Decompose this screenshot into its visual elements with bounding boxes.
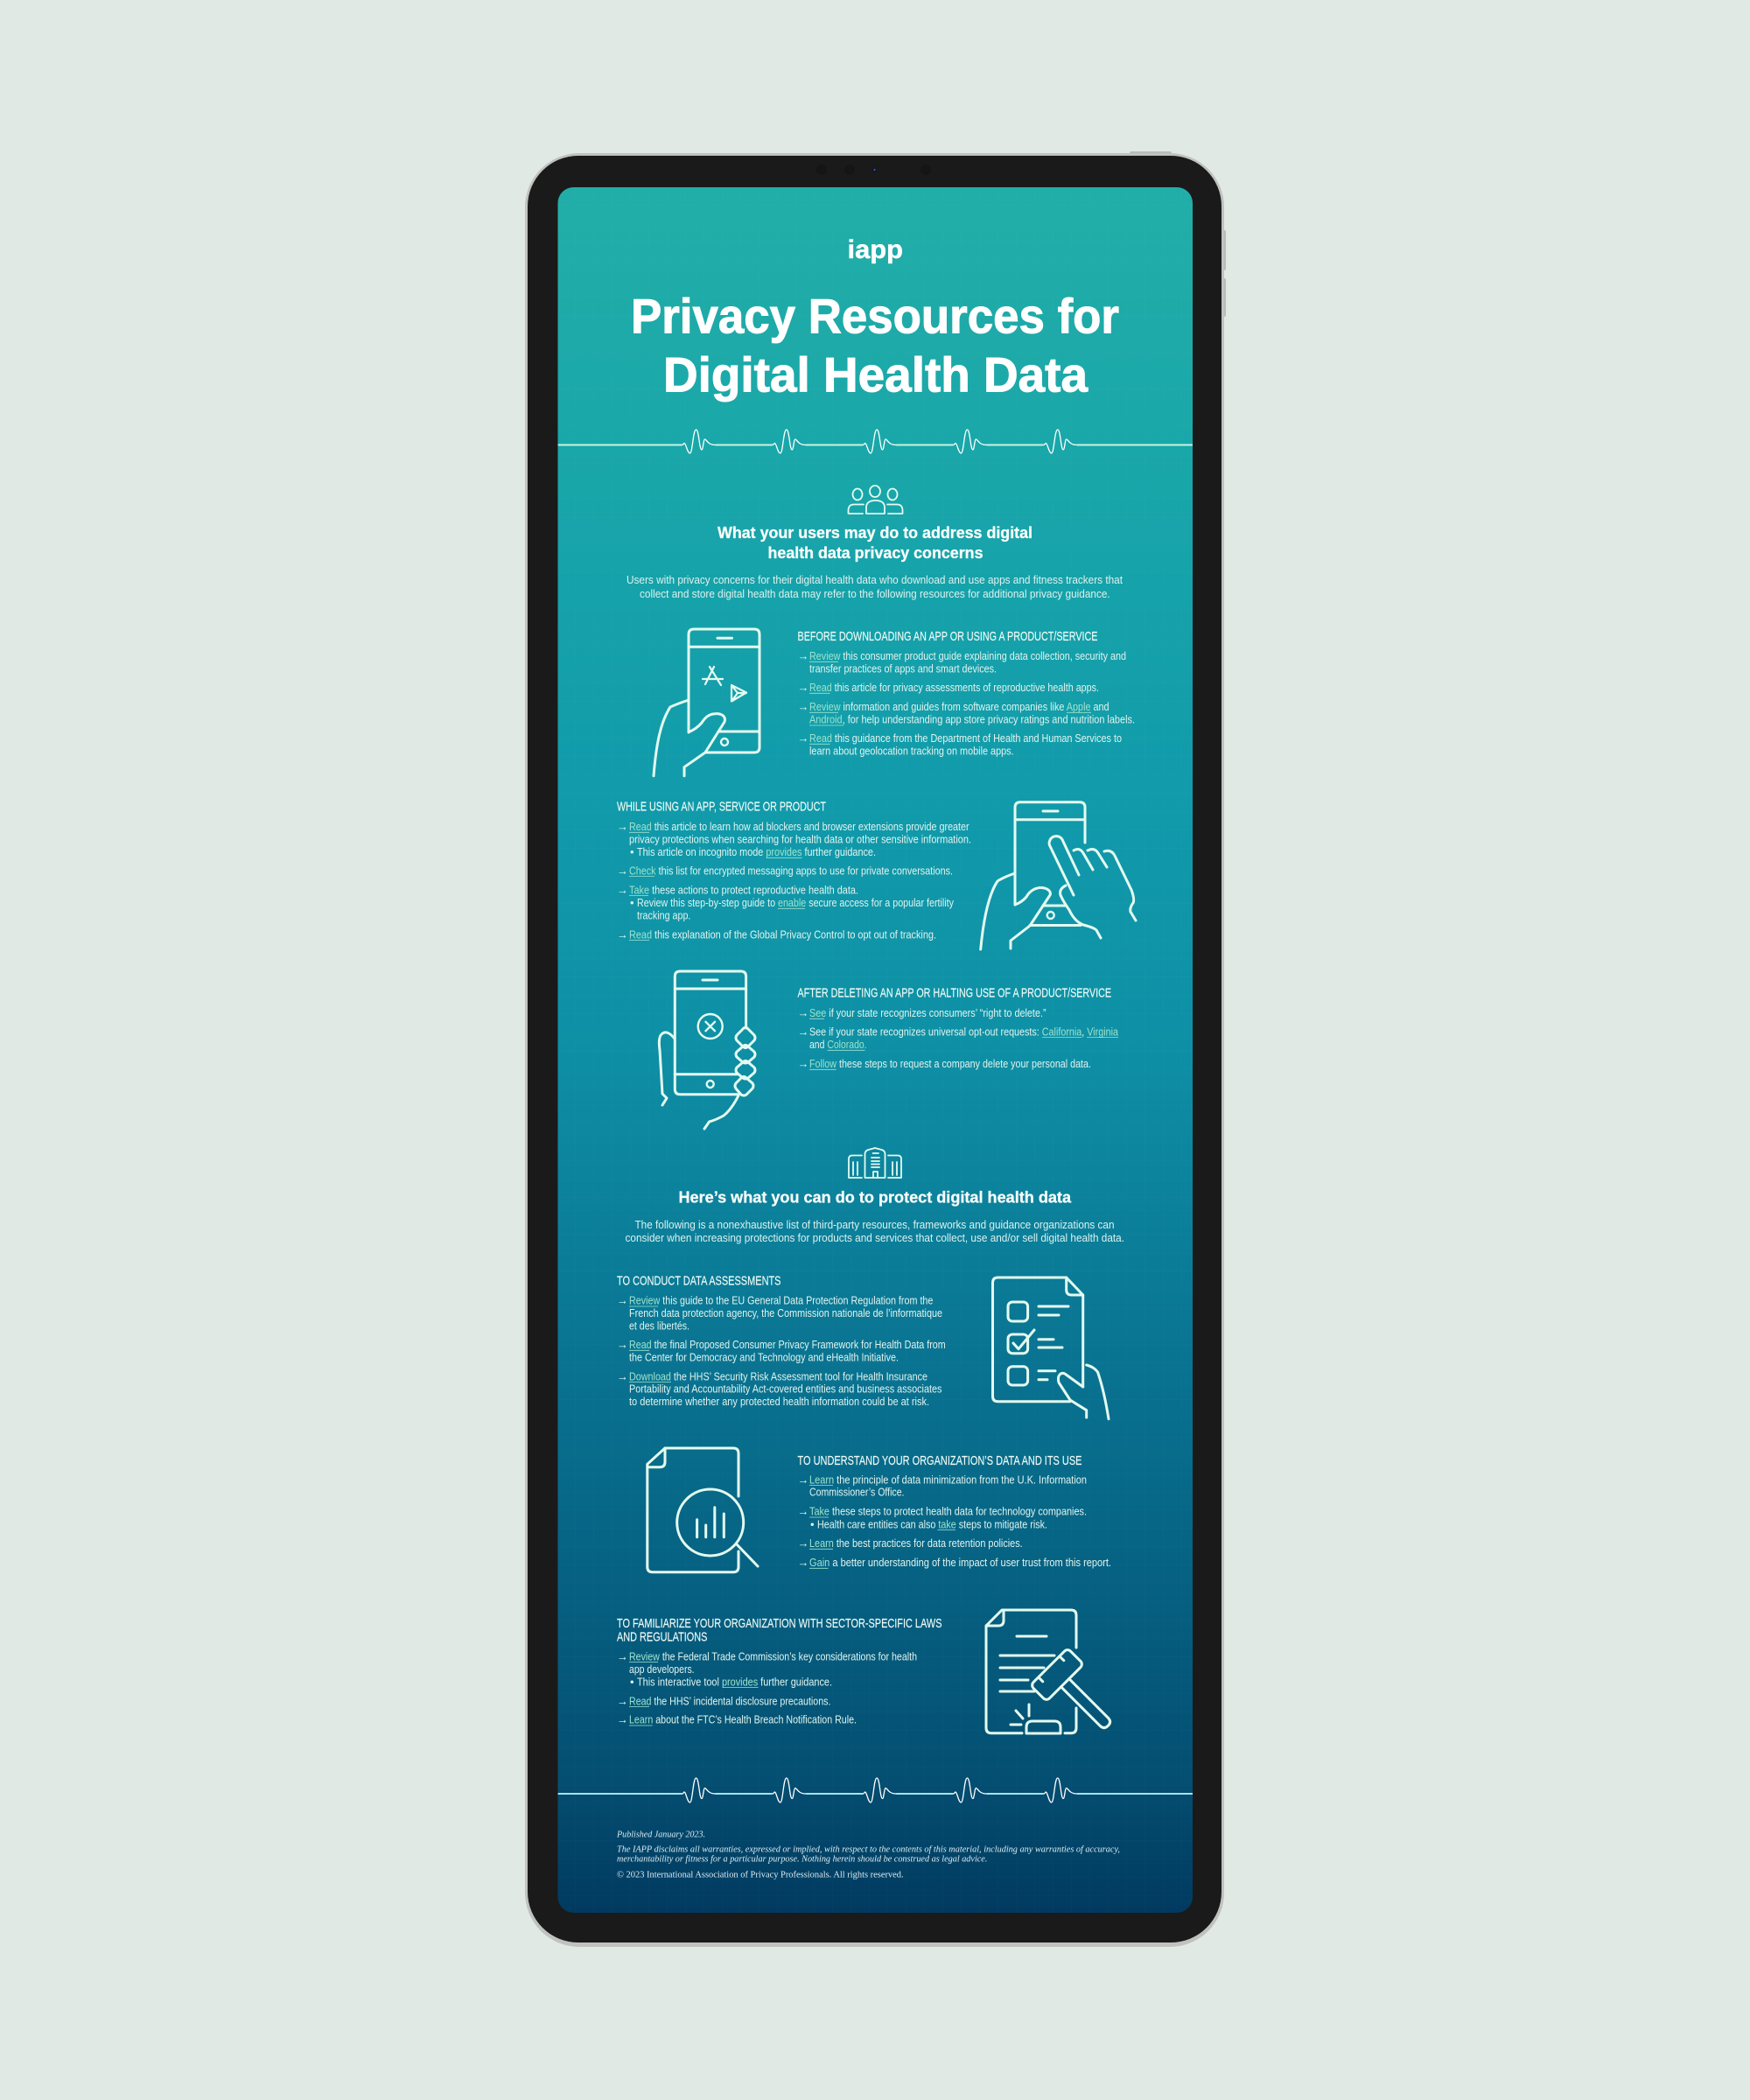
block: understand your data: Health care entities can also take steps to mitigate risk. bbox=[817, 1518, 1047, 1530]
block: sector laws: → bbox=[617, 1649, 628, 1662]
block: data assessments bbox=[617, 1274, 946, 1408]
heartbeat line top bbox=[558, 430, 1193, 453]
device black bezel bbox=[528, 156, 1222, 1942]
icon: document with gavel bbox=[986, 1610, 1127, 1745]
intro paragraph: users: Users with privacy concerns for their digital health data who download and use apps and fitness trackers that bbox=[626, 573, 1123, 586]
block: while using: → bbox=[617, 883, 628, 896]
icon: buildings bbox=[849, 1148, 901, 1178]
block: while using: WHILE USING AN APP, SERVICE OR PRODUCT bbox=[617, 801, 826, 815]
intro paragraph: users bbox=[626, 573, 1123, 600]
block: before downloading bbox=[798, 630, 1135, 757]
block: understand your data: Gain a better understanding of the impact of user trust from this report. bbox=[809, 1557, 1111, 1569]
block: before downloading: BEFORE DOWNLOADING AN APP OR USING A PRODUCT/SERVICE bbox=[798, 630, 1098, 644]
block: data assessments: et des libertés. bbox=[629, 1320, 690, 1332]
block: while using: Take these actions to protect reproductive health data. bbox=[629, 884, 858, 896]
block: while using: Review this step-by-step guide to enable secure access for a popular fertility bbox=[637, 897, 955, 909]
title: Privacy Resources for bbox=[631, 288, 1119, 343]
icon: two hands tapping phone bbox=[981, 802, 1136, 949]
footer notes: merchantability or fitness for a particular purpose. Nothing herein should be construed as legal advice. bbox=[617, 1854, 987, 1865]
block: sector laws: Review the Federal Trade Commission’s key considerations for health bbox=[629, 1650, 917, 1662]
block: before downloading: → bbox=[798, 700, 808, 713]
block: while using: → bbox=[617, 928, 628, 941]
section heading: organizations: Here’s what you can do to protect digital health data bbox=[679, 1187, 1072, 1206]
device silver frame bbox=[525, 153, 1224, 1947]
block: data assessments: TO CONDUCT DATA ASSESSMENTS bbox=[617, 1274, 780, 1288]
block: before downloading: Android, for help understanding app store privacy ratings and nutrition labels. bbox=[809, 714, 1135, 726]
section heading: users: health data privacy concerns bbox=[768, 543, 984, 562]
block: sector laws: TO FAMILIARIZE YOUR ORGANIZATION WITH SECTOR-SPECIFIC LAWS bbox=[617, 1617, 942, 1631]
block: data assessments: → bbox=[617, 1369, 628, 1382]
block: after deleting: See if your state recognizes consumers’ “right to delete.” bbox=[809, 1007, 1046, 1019]
intro paragraph: organizations bbox=[625, 1218, 1124, 1244]
block: before downloading: Read this guidance from the Department of Health and Human Services to bbox=[809, 732, 1122, 745]
footer notes bbox=[616, 1829, 1120, 1880]
block: while using: • bbox=[630, 845, 634, 858]
block: before downloading: → bbox=[798, 649, 808, 662]
block: understand your data: Learn the best practices for data retention policies. bbox=[809, 1537, 1023, 1550]
block: sector laws: Read the HHS’ incidental disclosure precautions. bbox=[629, 1695, 830, 1707]
block: while using: → bbox=[617, 820, 628, 833]
section heading: users bbox=[718, 523, 1032, 562]
block: understand your data: • bbox=[810, 1517, 815, 1530]
iapp logo: iapp bbox=[847, 235, 903, 264]
block: understand your data: → bbox=[798, 1473, 808, 1486]
block: understand your data: → bbox=[798, 1505, 808, 1518]
block: data assessments: French data protection agency, the Commission nationale de l’informatique bbox=[629, 1307, 942, 1320]
block: data assessments: Portability and Accountability Act-covered entities and business associates bbox=[629, 1383, 942, 1396]
icon: people bbox=[849, 486, 903, 514]
block: before downloading: Review this consumer product guide explaining data collection, security and bbox=[809, 650, 1126, 662]
icon: hand gripping phone with X bbox=[659, 971, 755, 1129]
block: before downloading: → bbox=[798, 732, 808, 745]
block: data assessments: → bbox=[617, 1294, 628, 1307]
footer notes: Published January 2023. bbox=[616, 1829, 705, 1839]
block: before downloading: learn about geolocation tracking on mobile apps. bbox=[809, 745, 1014, 757]
intro paragraph: organizations: consider when increasing protections for products and services that collect, use and/or sell digital health data. bbox=[625, 1231, 1124, 1244]
block: data assessments: the Center for Democracy and Technology and eHealth Initiative. bbox=[629, 1351, 899, 1363]
block: while using: Check this list for encrypted messaging apps to use for private conversations. bbox=[629, 864, 953, 877]
block: while using: Read this explanation of the Global Privacy Control to opt out of tracking. bbox=[629, 928, 936, 941]
footer notes: The IAPP disclaims all warranties, expressed or implied, with respect to the contents of this material, including any warranties of accuracy, bbox=[617, 1844, 1120, 1855]
block: after deleting: → bbox=[798, 1057, 808, 1070]
block: before downloading: Read this article for privacy assessments of reproductive health apps. bbox=[809, 682, 1099, 694]
block: data assessments: Download the HHS’ Security Risk Assessment tool for Health Insurance bbox=[629, 1370, 928, 1382]
block: data assessments: Review this guide to the EU General Data Protection Regulation from the bbox=[629, 1295, 933, 1307]
title bbox=[631, 288, 1119, 402]
block: understand your data: → bbox=[798, 1536, 808, 1550]
block: sector laws: This interactive tool provides further guidance. bbox=[637, 1676, 832, 1688]
block: after deleting: Follow these steps to request a company delete your personal data. bbox=[809, 1058, 1091, 1070]
block: after deleting: See if your state recognizes universal opt-out requests: California, Virginia bbox=[809, 1026, 1118, 1038]
block: understand your data bbox=[798, 1454, 1111, 1569]
title: Digital Health Data bbox=[663, 347, 1088, 402]
tablet device bbox=[525, 151, 1226, 1947]
block: after deleting: → bbox=[798, 1025, 808, 1038]
device side buttons bbox=[1130, 151, 1226, 317]
intro paragraph: organizations: The following is a nonexhaustive list of third-party resources, frameworks and guidance organizations can bbox=[635, 1218, 1115, 1231]
block: sector laws: AND REGULATIONS bbox=[617, 1630, 707, 1644]
block: while using: tracking app. bbox=[637, 910, 690, 922]
block: sector laws: Learn about the FTC’s Health Breach Notification Rule. bbox=[629, 1714, 857, 1726]
icon: document with magnifier and bars bbox=[648, 1448, 758, 1572]
block: while using: This article on incognito mode provides further guidance. bbox=[637, 846, 876, 858]
block: sector laws: app developers. bbox=[629, 1663, 695, 1676]
block: understand your data: Take these steps to protect health data for technology companies. bbox=[809, 1506, 1087, 1518]
block: data assessments: Read the final Proposed Consumer Privacy Framework for Health Data from bbox=[629, 1339, 946, 1351]
heartbeat line bottom bbox=[558, 1778, 1193, 1802]
block: data assessments: to determine whether any protected health information could be at risk. bbox=[629, 1396, 929, 1408]
front camera bbox=[816, 164, 931, 175]
block: after deleting: → bbox=[798, 1006, 808, 1019]
block: sector laws: → bbox=[617, 1713, 628, 1726]
icon: hand holding phone with app stores bbox=[654, 629, 760, 776]
block: while using bbox=[617, 801, 971, 941]
block: before downloading: Review information and guides from software companies like Apple and bbox=[809, 701, 1110, 713]
block: sector laws: → bbox=[617, 1694, 628, 1707]
footer notes: © 2023 International Association of Privacy Professionals. All rights reserved. bbox=[617, 1869, 904, 1880]
block: sector laws: • bbox=[630, 1675, 634, 1688]
section heading: users: What your users may do to address digital bbox=[718, 523, 1032, 542]
block: understand your data: TO UNDERSTAND YOUR ORGANIZATION’S DATA AND ITS USE bbox=[798, 1454, 1082, 1468]
block: understand your data: Commissioner’s Office. bbox=[809, 1487, 905, 1499]
block: while using: Read this article to learn how ad blockers and browser extensions provide greater bbox=[629, 821, 970, 833]
block: while using: → bbox=[617, 864, 628, 877]
block: after deleting bbox=[798, 987, 1118, 1070]
intro paragraph: users: collect and store digital health data may refer to the following resources for additional privacy guidance. bbox=[640, 587, 1110, 600]
block: sector laws bbox=[617, 1617, 942, 1726]
block: understand your data: → bbox=[798, 1556, 808, 1569]
block: after deleting: and Colorado. bbox=[809, 1039, 867, 1051]
block: before downloading: → bbox=[798, 681, 808, 694]
block: while using: privacy protections when searching for health data or other sensitive information. bbox=[629, 833, 971, 845]
block: after deleting: AFTER DELETING AN APP OR HALTING USE OF A PRODUCT/SERVICE bbox=[798, 987, 1111, 1001]
icon: checklist with hand bbox=[992, 1278, 1109, 1419]
screen bbox=[558, 187, 1193, 1913]
block: while using: • bbox=[630, 896, 634, 909]
block: understand your data: Learn the principle of data minimization from the U.K. Information bbox=[809, 1474, 1087, 1486]
block: before downloading: transfer practices of apps and smart devices. bbox=[809, 662, 997, 675]
block: data assessments: → bbox=[617, 1338, 628, 1351]
